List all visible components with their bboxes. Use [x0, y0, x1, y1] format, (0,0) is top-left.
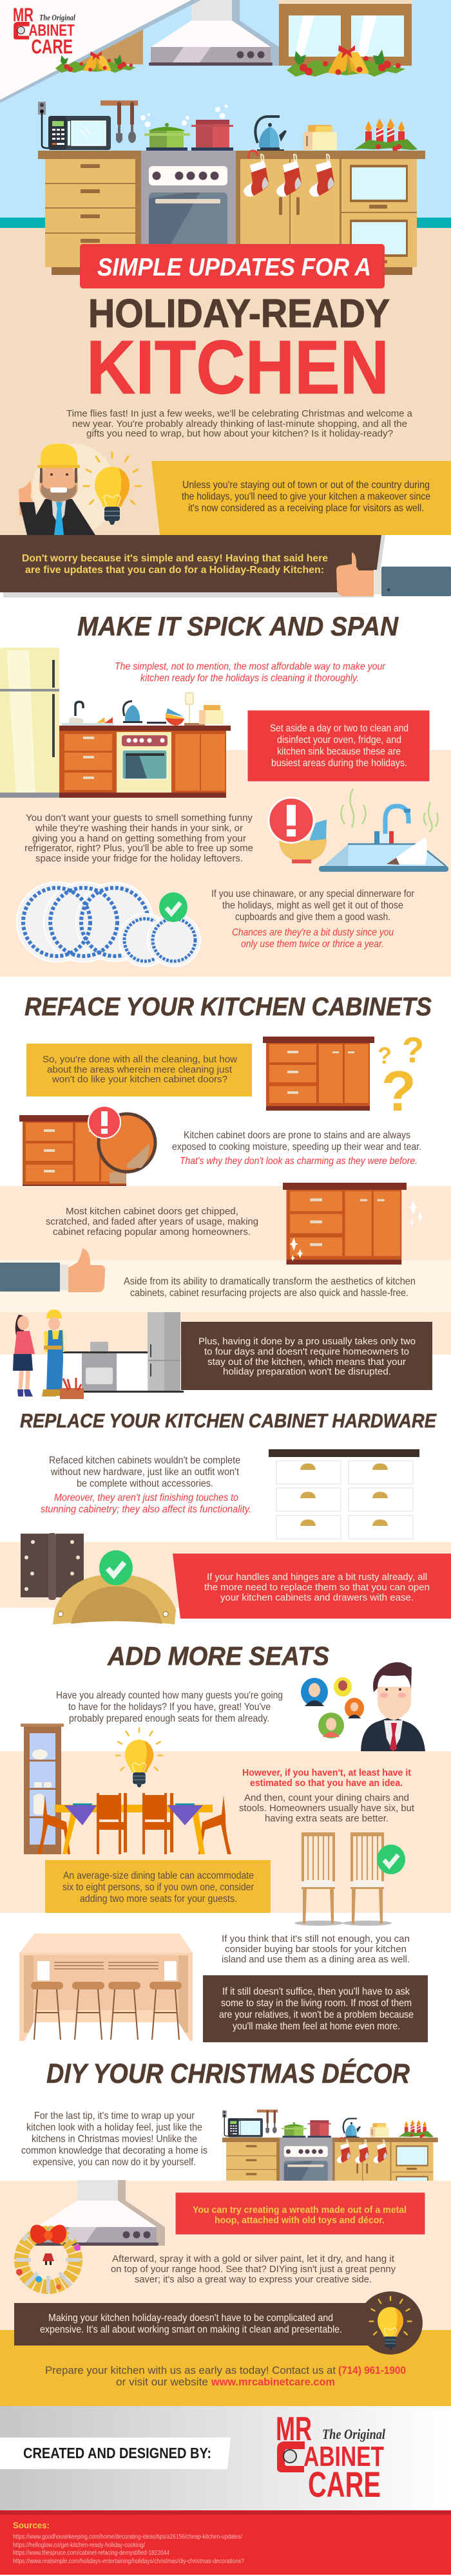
sources footer: https://www.goodhousekeeping.com/home/decorating-ideas/tips/a26156/cheap-kitchen-updates/ [13, 2534, 242, 2541]
illustration: cabinet [263, 1037, 374, 1111]
yellow callout: table: six to eight persons, so if you own one, consider [62, 1882, 254, 1893]
brown callout: relatives: If it still doesn't suffice, then you'll have to ask [222, 1986, 410, 1997]
yellow callout: cleaning: won't do like your kitchen cabinet doors? [52, 1074, 227, 1085]
outlet and toaster [186, 693, 193, 704]
brown callout: relatives: are your relatives, it won't be a problem because [219, 2009, 414, 2020]
contact text [45, 2364, 406, 2388]
brown callout with thumbs-up [0, 535, 451, 597]
red callout [247, 710, 430, 782]
text: estimate: having extra seats are better. [265, 1813, 389, 1824]
sink and dishes [75, 702, 83, 716]
red callout: disinfect your oven, fridge, and [277, 735, 401, 746]
text: stains: exposed to cooking moisture, speeding up their wear and tear. [172, 1142, 421, 1152]
contact text: (714) 961-1900 [338, 2364, 406, 2376]
red callout: hinges [173, 1554, 451, 1619]
brown callout: pro: holiday preparation won't be disrupted. [223, 1366, 391, 1377]
text: guests: Have you already counted how many guests you're going [56, 1690, 283, 1701]
text: hardware: Moreover, they aren't just finishing touches to [54, 1492, 238, 1503]
logo [276, 2411, 386, 2505]
heading: add more seats: ADD MORE SEATS [107, 1641, 329, 1671]
illustration: kitchen island with stools [19, 1933, 193, 2041]
text: afterward [111, 2253, 396, 2285]
text: estimate: However, if you haven't, at least have it [242, 1767, 411, 1778]
yellow callout: it's now considered as a receiving place for visitors as well. [188, 503, 424, 514]
section background: peach seats [0, 1751, 451, 1913]
logo: CARE [31, 35, 73, 58]
text: refacing [46, 1206, 258, 1237]
logo: ABINET [29, 22, 75, 40]
text: hardware [41, 1455, 251, 1515]
yellow callout: cleaning: So, you're done with all the cleaning, but how [43, 1054, 237, 1065]
icon: question marks [378, 1029, 424, 1123]
illustration: two chairs with check [294, 1832, 405, 1926]
body text: guests: space inside your fridge for the holiday leftovers. [35, 853, 243, 864]
title: kitchen: KITCHEN [86, 325, 389, 410]
text: estimate: estimated so that you have an idea. [250, 1778, 403, 1789]
icon: check [159, 892, 187, 922]
red callout: wreath: You can try creating a wreath made out of a metal [193, 2205, 407, 2215]
logo [13, 5, 75, 58]
text: chinaware: the holidays, might as well get it out of those [222, 900, 403, 911]
illustration: refaced cabinet with sparkles [283, 1183, 424, 1264]
text: guests: to have for the holidays? If you have, great! You've [68, 1702, 271, 1713]
red callout: hinges: your kitchen cabinets and drawers with ease. [220, 1592, 414, 1603]
title: holiday-ready: HOLIDAY-READY [88, 292, 390, 336]
text: afterward: saver; it's also a great way to express your creative side. [135, 2274, 372, 2285]
icon: thumbs-up hand [336, 552, 451, 596]
text: last tip [21, 2111, 207, 2168]
brown conclusion banner: Making your kitchen holiday-ready doesn't have to be complicated and [48, 2313, 333, 2324]
range hood [149, 0, 279, 66]
kitchen counter and appliances [38, 100, 425, 275]
icon: question marks: ? [378, 1042, 392, 1069]
red callout: hinges: If your handles and hinges are a bit rusty already, all [207, 1572, 427, 1583]
text: afterward: Afterward, spray it with a gold or silver paint, let it dry, and hang it [112, 2253, 395, 2264]
avatars [301, 1678, 328, 1706]
intro text: gifts you need to wrap, but how about your kitchen? Is it holiday-ready? [86, 428, 393, 439]
diagonal white corner [0, 0, 191, 100]
text: hardware: be complete without accessories. [77, 1478, 213, 1489]
text: last tip: kitchen look with a holiday feel, just like the [26, 2122, 202, 2133]
illustration: contractor and homeowner in white kitchen [13, 1310, 184, 1399]
text: chinaware: Chances are they're a bit dusty since you [232, 927, 394, 938]
text: hardware: stunning cabinetry; they also affect its functionality. [41, 1504, 251, 1515]
brown callout: relatives: some to stay in the living room. If most of them [221, 1998, 412, 2009]
heading: make it spick and span: MAKE IT SPICK AND SPAN [77, 611, 399, 641]
brown callout: pro: stay out of the kitchen, which means that your [207, 1357, 406, 1368]
text: aesthetics: Aside from its ability to dramatically transform the aesthetics of kitchen [124, 1276, 416, 1287]
text: guests [56, 1690, 283, 1724]
text: last tip: For the last tip, it's time to wrap up your [34, 2111, 195, 2121]
sources footer: https://www.realsimple.com/holidays-entertaining/holidays/christmas/diy-christmas-decorations? [13, 2558, 244, 2565]
title banner: SIMPLE UPDATES FOR A [97, 254, 371, 281]
text: hardware: Refaced kitchen cabinets wouldn't be complete [49, 1455, 240, 1466]
body text: guests: while they're washing their hands in your sink, or [35, 823, 243, 834]
text: refacing: scratched, and faded after years of usage, making [46, 1216, 258, 1227]
raised hand [19, 481, 34, 517]
illustration: dining table and chairs [37, 1793, 231, 1854]
credits panel [0, 2406, 451, 2510]
text: bar stools: If you think that it's still not enough, you can [222, 1933, 410, 1944]
body text: guests: refrigerator, right? Plus, you'll be able to free up some [24, 843, 253, 854]
hero panel: kitchen scene [0, 0, 451, 535]
text: afterward: on top of your range hood. See that? DIYing isn't just a great penny [111, 2264, 396, 2275]
garland on cabinet [55, 52, 136, 73]
text: stains: Kitchen cabinet doors are prone to stains and are always [184, 1130, 410, 1141]
brown conclusion banner [14, 2291, 423, 2355]
illustration: range hood [35, 2180, 165, 2246]
body text: guests [24, 813, 253, 864]
brown callout: relatives: you'll make them feel at home even more. [233, 2021, 400, 2032]
section background: peach hinge band [0, 1542, 451, 1608]
red callout: kitchen sink because these are [277, 746, 401, 757]
illustration: china plates [17, 882, 200, 966]
logo: ABINET [303, 2441, 384, 2472]
red callout: wreath: hoop, attached with old toys and décor. [215, 2215, 385, 2226]
man [361, 1716, 425, 1751]
woman [13, 1315, 35, 1396]
illustration: fridge and orange kitchen [0, 648, 231, 798]
text: hardware: without new hardware, just like an outfit won't [50, 1467, 239, 1478]
logo: The Original [322, 2426, 386, 2442]
text: stains: That's why they don't look as charming as they were before. [180, 1156, 417, 1167]
brown callout: pro [181, 1322, 432, 1390]
brown callout: pro: Plus, having it done by a pro usually takes only two [198, 1336, 416, 1347]
bowl [309, 820, 327, 841]
red callout: wreath [175, 2192, 425, 2235]
toolbox [60, 1378, 84, 1399]
text: aesthetics [124, 1276, 416, 1299]
yellow callout: table: An average-size dining table can accommodate [63, 1870, 254, 1881]
illustration: smelly sink [269, 789, 448, 872]
illustration: wreath [16, 2224, 81, 2293]
yellow callout [151, 461, 451, 535]
sources footer: https://helloglow.co/get-kitchen-ready-holiday-cooking/ [13, 2542, 145, 2549]
red callout: busiest areas during the holidays. [271, 758, 407, 769]
section background: peach diy [0, 2181, 451, 2330]
body text: guests: giving you a hand on getting something from your [32, 833, 246, 844]
text: chinaware [211, 888, 415, 950]
suit [19, 499, 95, 535]
text: stains [172, 1130, 421, 1167]
brown callout with thumbs-up: are five updates that you can do for a Holiday-Ready Kitchen: [25, 565, 324, 576]
red italic lead: kitchen ready for the holidays is cleaning it thoroughly. [140, 673, 359, 684]
garland on window [287, 45, 405, 77]
red callout: hinges: the more need to replace them so that you can open [204, 1582, 430, 1593]
icon: alert [269, 798, 314, 843]
body text: guests: You don't want your guests to smell something funny [26, 813, 253, 823]
icon: question marks: ? [402, 1029, 424, 1070]
section background bands [0, 1186, 451, 1355]
illustration: gold cup pull [53, 1550, 176, 1624]
brown callout: pro: to four days and doesn't require homeowners to [204, 1346, 409, 1357]
hard hat [41, 444, 77, 465]
face [39, 466, 78, 500]
icon: thumbs-up sleeve [0, 1248, 105, 1292]
contact text: or visit our website [116, 2376, 208, 2388]
window [278, 0, 412, 88]
text: aesthetics: cabinets, cabinet resurfacing projects are also quick and hassle-free. [130, 1288, 408, 1299]
logo: The Original [39, 14, 75, 23]
illustration: damaged cabinet with magnifier [19, 1106, 155, 1189]
text: last tip: kitchens in Christmas movies! Unlike the [32, 2134, 197, 2145]
text: chinaware: only use them twice or thrice a year. [241, 939, 384, 950]
sources footer: Sources: [13, 2520, 50, 2530]
text: refacing: Most kitchen cabinet doors get chipped, [66, 1206, 238, 1217]
text: estimate: stools. Homeowners usually have six, but [239, 1803, 415, 1814]
icon: light bulb [84, 453, 140, 525]
credits panel: CREATED AND DESIGNED BY: [23, 2445, 211, 2461]
illustration: thinking man and guest avatars [301, 1662, 425, 1751]
illustration: hinge [21, 1533, 84, 1600]
icon: question marks: ? [381, 1059, 416, 1123]
illustration: contractor with light bulb [19, 444, 116, 535]
text: chinaware: If you use chinaware, or any special dinnerware for [211, 888, 415, 899]
text: refacing: cabinet refacing popular among homeowners. [53, 1227, 251, 1237]
text: bar stools: consider buying bar stools for your kitchen [225, 1944, 407, 1955]
heading: diy: DIY YOUR CHRISTMAS DÉCOR [46, 2058, 410, 2089]
yellow callout: cleaning: about the areas wherein mere cleaning just [47, 1064, 233, 1075]
text: last tip: expensive, you can now do it by yourself. [33, 2157, 196, 2168]
brown conclusion banner: expensive. It's all about working smart on making it clean and presentable. [40, 2324, 342, 2335]
sources footer [0, 2510, 451, 2575]
illustration: white cabinet drawers with gold pulls [269, 1449, 419, 1542]
worker [42, 1310, 64, 1396]
logo: MR [276, 2411, 312, 2448]
brown callout with thumbs-up: Don't worry because it's simple and easy! Having that said here [22, 553, 328, 564]
icon: check [377, 1845, 405, 1874]
text: guests: probably prepared enough seats for them already. [69, 1713, 269, 1724]
text: bar stools: island and use them as a dining area as well. [222, 1954, 410, 1965]
yellow callout: table: adding two more seats for your guests. [80, 1894, 237, 1904]
contact text: www.mrcabinetcare.com [211, 2376, 335, 2388]
logo: CARE [308, 2464, 381, 2505]
text: chinaware: cupboards and give them a good wash. [235, 912, 390, 923]
red italic lead: The simplest, not to mention, the most affordable way to make your [115, 661, 386, 672]
intro text: new year. You're probably already thinking of last-minute shopping, and all the [72, 418, 407, 429]
yellow callout: cleaning [26, 1044, 252, 1096]
text: estimate [239, 1767, 415, 1824]
logo: MR [13, 5, 34, 26]
kettle [124, 701, 132, 716]
contact text: Prepare your kitchen with us as early as today! Contact us at [45, 2364, 336, 2376]
upper cabinet [71, 24, 143, 64]
bowl [166, 708, 184, 717]
text: estimate: And then, count your dining chairs and [244, 1792, 409, 1803]
illustration: china cabinet [21, 1724, 64, 1854]
title banner [80, 244, 385, 288]
section background: peach [0, 750, 451, 977]
icon: alert [88, 1106, 120, 1138]
yellow callout: table [45, 1860, 271, 1913]
sources footer: https://www.thespruce.com/cabinet-refacing-demystified-1822044 [13, 2550, 169, 2557]
text: bar stools [222, 1933, 410, 1965]
section background: yellow contact [0, 2330, 451, 2406]
illustration: mini decorated kitchen [222, 2109, 438, 2181]
red callout: Set aside a day or two to clean and [270, 723, 408, 734]
icon: check [99, 1550, 133, 1585]
icon: light bulb over table [116, 1728, 162, 1787]
intro text: Time flies fast! In just a few weeks, we'll be celebrating Christmas and welcome a [66, 408, 413, 419]
brown callout: relatives [203, 1975, 428, 2042]
intro text [66, 408, 413, 439]
icon: light bulb [369, 2297, 412, 2350]
text: last tip: common knowledge that decorating a home is [21, 2145, 207, 2156]
red italic lead [115, 661, 386, 684]
